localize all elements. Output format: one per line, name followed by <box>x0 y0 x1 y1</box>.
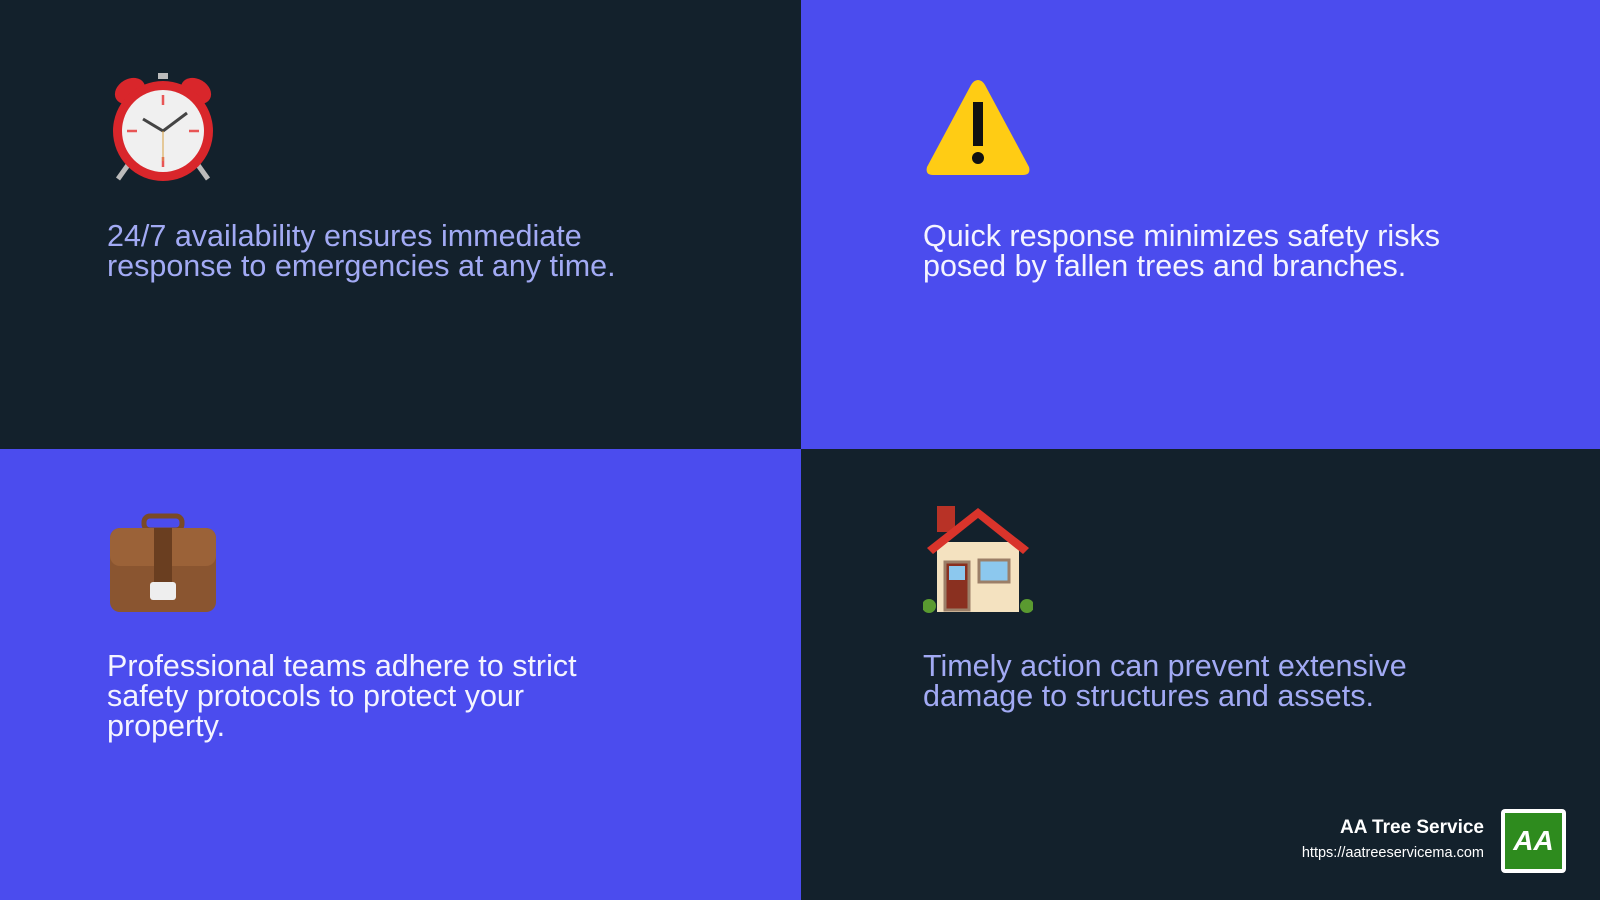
brand block <box>1302 809 1566 873</box>
text: timely action <box>923 649 1407 713</box>
text: availability <box>107 219 616 283</box>
text: availability: 24/7 availability ensures immediate <box>107 219 582 253</box>
text: quick response: Quick response minimizes safety risks <box>923 219 1440 253</box>
text: availability: response to emergencies at any time. <box>107 249 616 283</box>
panel: quick response <box>801 0 1600 449</box>
icon: house <box>923 506 1033 613</box>
brand name: AA Tree Service <box>1340 817 1484 838</box>
panel: timely action <box>801 449 1600 900</box>
panel: professional teams <box>0 449 801 900</box>
text: quick response <box>923 219 1440 283</box>
text: professional teams: Professional teams adhere to strict <box>107 649 577 683</box>
text: quick response: posed by fallen trees and branches. <box>923 249 1406 283</box>
text: professional teams: safety protocols to protect your <box>107 679 524 713</box>
text: professional teams <box>107 649 577 743</box>
text: timely action: damage to structures and assets. <box>923 679 1374 713</box>
icon: alarm clock <box>113 73 213 181</box>
text: timely action: Timely action can prevent extensive <box>923 649 1407 683</box>
logo <box>1501 809 1566 873</box>
panel: 24/7 availability <box>0 0 801 449</box>
icon: warning <box>926 80 1030 175</box>
text: professional teams: property. <box>107 709 225 743</box>
brand url: https://aatreeservicema.com <box>1302 845 1484 861</box>
icon: briefcase <box>110 514 216 612</box>
logo: AA <box>1513 825 1554 856</box>
